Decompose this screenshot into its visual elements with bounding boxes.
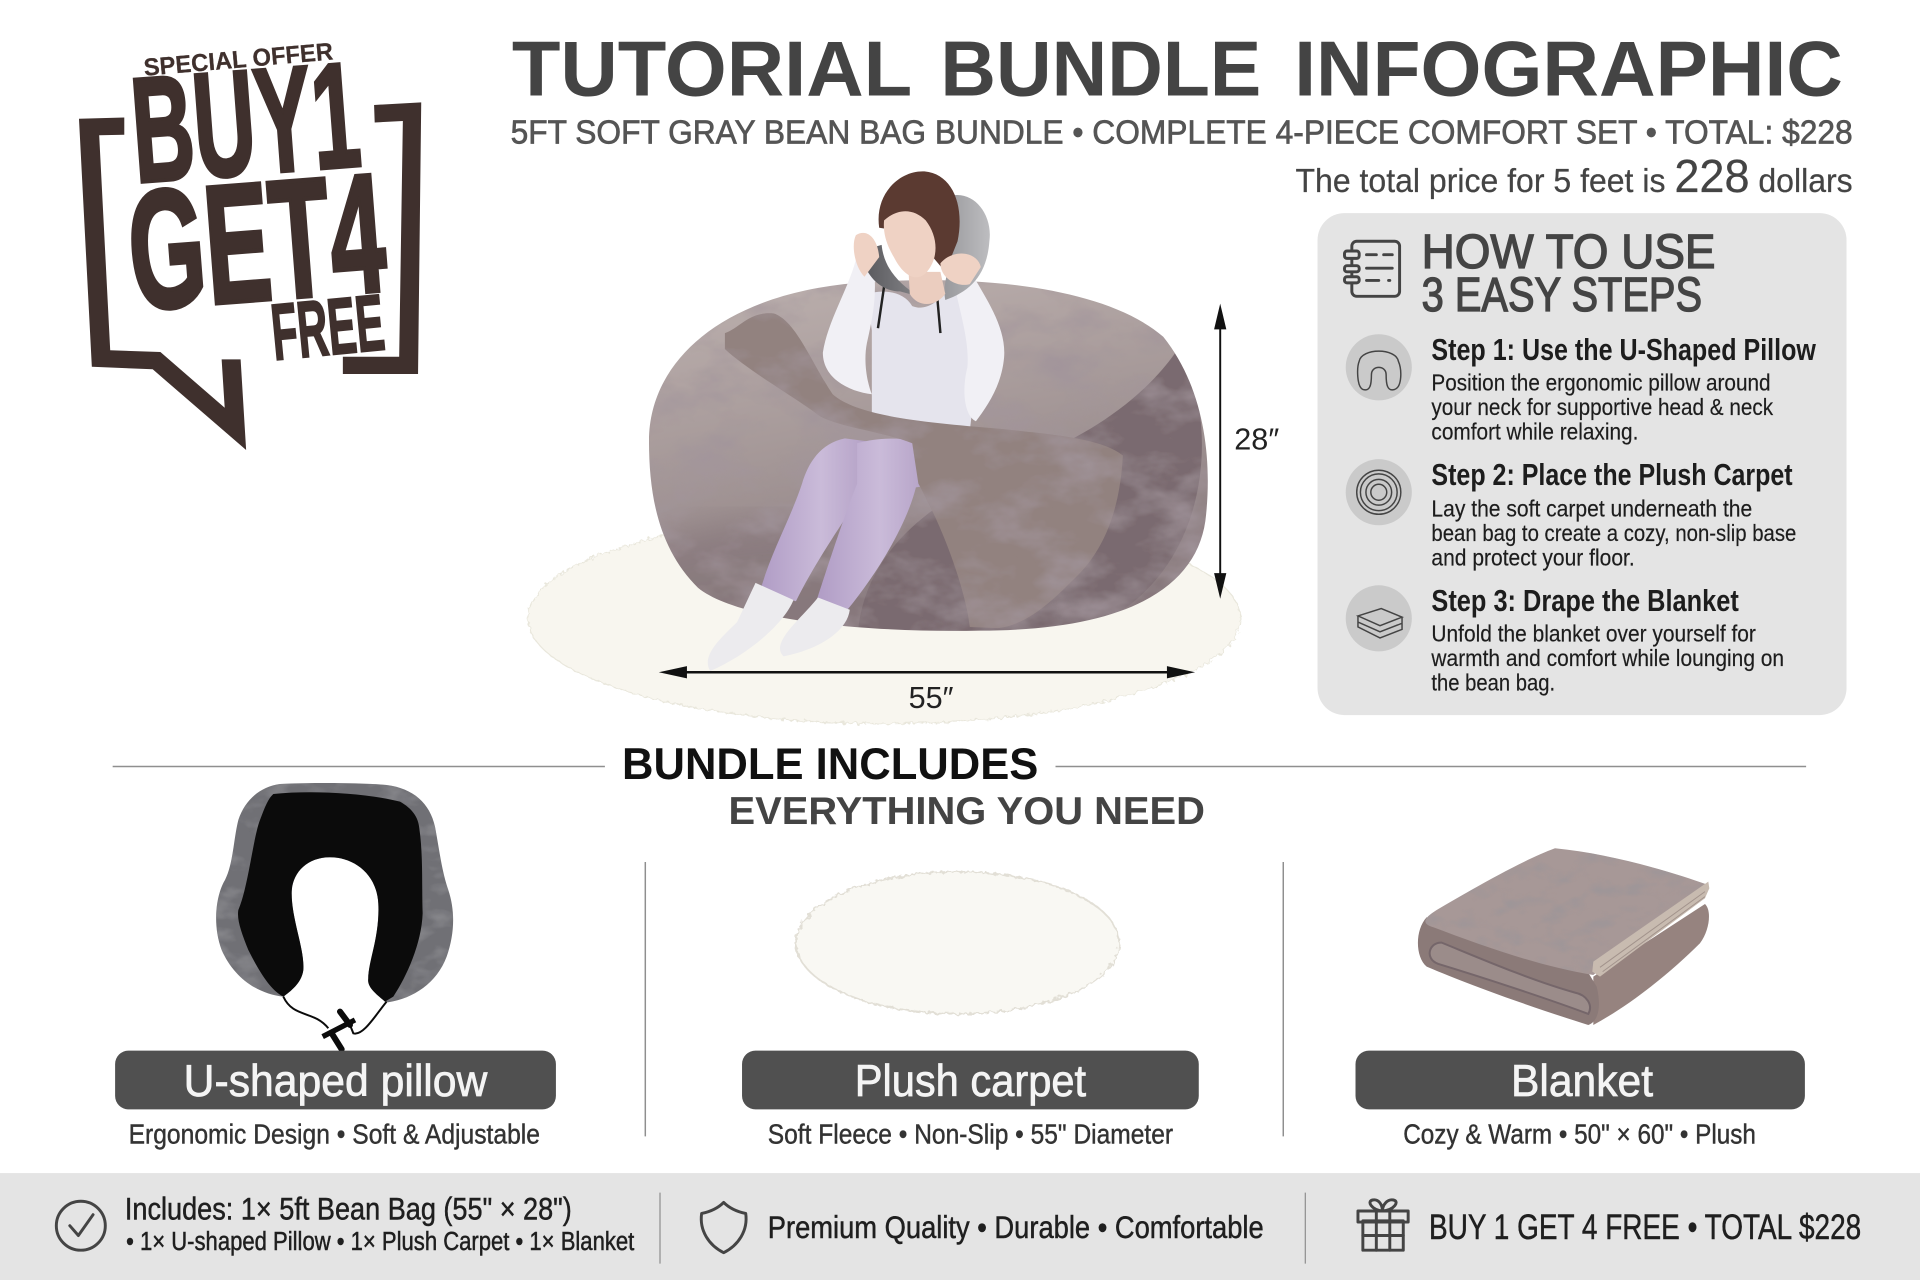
- product: plush carpet: [796, 872, 1119, 1014]
- woman's legs: [760, 438, 943, 610]
- label: blanket: [1356, 1051, 1805, 1109]
- includes details: • 1× U-shaped Pillow • 1× Plush Carpet • 1× Blanket: [126, 1228, 634, 1256]
- section subheading: EVERYTHING YOU NEED: [729, 790, 1205, 833]
- neck pillow: [861, 195, 990, 300]
- step 3 title: Step 3: Drape the Blanket: [1431, 584, 1739, 618]
- draped blanket: [725, 313, 1123, 628]
- bean bag: [649, 280, 1208, 631]
- pillow black inner: [238, 792, 423, 1002]
- subtitle: 5FT SOFT GRAY BEAN BAG BUNDLE • COMPLETE 4-PIECE COMFORT SET • TOTAL: $228: [511, 114, 1853, 151]
- pillow velvet shell: [216, 783, 453, 1002]
- face: [884, 211, 936, 277]
- label: u-shaped pillow: [115, 1051, 556, 1109]
- hair: [879, 171, 960, 272]
- neck: [909, 272, 945, 304]
- buy 1: BUY1: [126, 31, 365, 214]
- label: plush carpet: Plush carpet: [855, 1057, 1086, 1106]
- rug: [528, 513, 1240, 724]
- step 3 text: [1431, 621, 1784, 696]
- width arrowheads: [659, 666, 1195, 678]
- icon: carpet step: [1346, 459, 1412, 525]
- label: plush carpet: [742, 1051, 1199, 1109]
- height label: 28″: [1234, 422, 1279, 456]
- width label: 55″: [909, 681, 954, 715]
- caption: carpet: Soft Fleece • Non-Slip • 55" Diameter: [768, 1119, 1173, 1150]
- heading line 2: 3 EASY STEPS: [1422, 269, 1702, 322]
- caption: pillow: Ergonomic Design • Soft & Adjustable: [129, 1119, 540, 1150]
- height arrowheads: [1214, 304, 1226, 599]
- step 1 text: Position the ergonomic pillow around: [1431, 370, 1771, 396]
- hands: [854, 233, 981, 285]
- footer band: [0, 1173, 1920, 1280]
- panel: how to use: [1318, 213, 1847, 715]
- blanket roll: [1418, 917, 1599, 1025]
- title: [512, 25, 1843, 113]
- woman's torso: [867, 291, 977, 431]
- step 1 text: comfort while relaxing.: [1431, 419, 1638, 445]
- product: u-shaped pillow: [216, 783, 453, 1049]
- caption: blanket: Cozy & Warm • 50" × 60" • Plush: [1403, 1119, 1756, 1150]
- step 2 text: Lay the soft carpet underneath the: [1431, 496, 1752, 522]
- title: BUNDLE: [940, 25, 1261, 113]
- step 1 title: Step 1: Use the U-Shaped Pillow: [1431, 333, 1816, 367]
- blanket top: [1425, 848, 1708, 975]
- step 1 text: your neck for supportive head & neck: [1431, 394, 1773, 420]
- quality text: Premium Quality • Durable • Comfortable: [768, 1209, 1264, 1245]
- free: FREE: [267, 278, 388, 377]
- pillow cord and toggle: [283, 997, 387, 1049]
- width arrow: [680, 671, 1178, 673]
- socks: [708, 583, 850, 671]
- icon: shield: [701, 1202, 746, 1253]
- special offer: SPECIAL OFFER: [143, 38, 334, 82]
- step 3 text: the bean bag.: [1431, 670, 1555, 696]
- label: blanket: Blanket: [1511, 1057, 1653, 1106]
- blanket fold: [1430, 943, 1590, 1014]
- step 2 title: Step 2: Place the Plush Carpet: [1431, 458, 1793, 492]
- icon: check: [56, 1201, 105, 1250]
- step 1 text: [1431, 370, 1773, 445]
- includes line: Includes: 1× 5ft Bean Bag (55" × 28"): [125, 1191, 572, 1227]
- speech bubble bracket left: [79, 118, 246, 450]
- step 3 text: Unfold the blanket over yourself for: [1431, 621, 1756, 647]
- title: INFOGRAPHIC: [1294, 25, 1843, 113]
- height arrow: [1219, 321, 1221, 580]
- speech bubble bracket right: [343, 102, 421, 374]
- icon: blanket step: [1346, 585, 1412, 651]
- drawstrings: [878, 287, 940, 333]
- get 4: GET4: [122, 138, 391, 346]
- blanket side: [1593, 904, 1709, 1025]
- section heading: BUNDLE INCLUDES: [622, 740, 1038, 789]
- step 2 text: bean bag to create a cozy, non-slip base: [1431, 520, 1796, 546]
- icon: checklist: [1344, 241, 1400, 296]
- step 3 text: warmth and comfort while lounging on: [1431, 645, 1784, 671]
- product: folded blanket: [1418, 848, 1709, 1025]
- icon: gift: [1358, 1200, 1408, 1250]
- step 2 text: [1431, 496, 1796, 571]
- badge: buy 1 get 4 free: [79, 31, 421, 450]
- icon: pillow step: [1346, 334, 1412, 400]
- main photo: woman on bean bag with rug: [528, 171, 1279, 724]
- price note: The total price for 5 feet is 228 dollars: [1296, 150, 1853, 202]
- label: u-shaped pillow: U-shaped pillow: [184, 1057, 488, 1106]
- blanket edge: [1592, 882, 1709, 977]
- heading: HOW TO USE: [1422, 226, 1716, 279]
- title: TUTORIAL: [512, 25, 912, 113]
- step 2 text: and protect your floor.: [1431, 545, 1635, 571]
- woman's arms: [823, 260, 1004, 421]
